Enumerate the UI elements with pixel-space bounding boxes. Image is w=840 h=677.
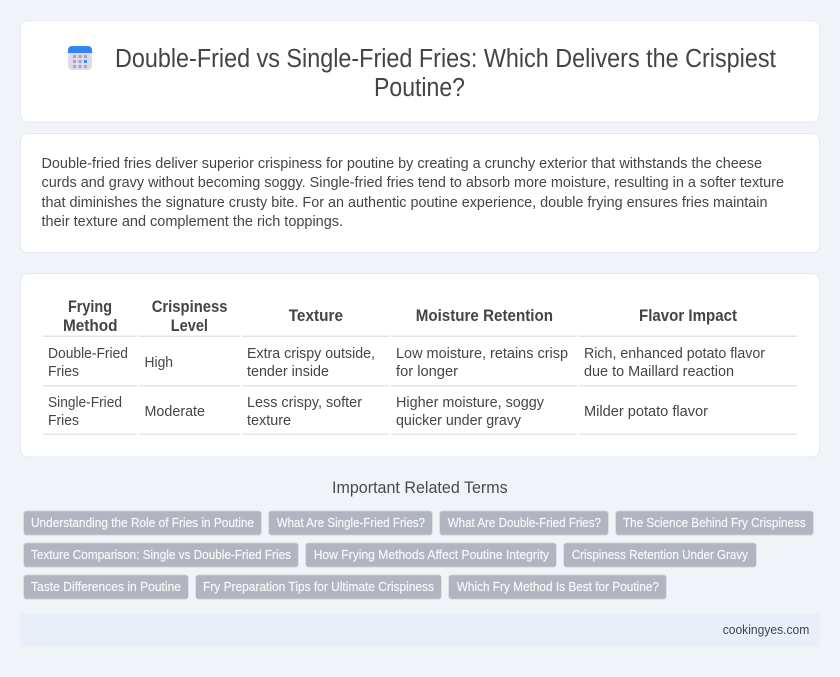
table row: double-fried fries: Double-Fried <box>48 345 128 362</box>
table header row: Crispiness <box>152 298 228 316</box>
table header row: Moisture Retention <box>416 307 553 325</box>
related term tags: Which Fry Method Is Best for Poutine? <box>457 579 659 594</box>
related term tags: Taste Differences in Poutine <box>31 579 181 594</box>
table row: double-fried fries: due to Maillard reaction <box>584 363 734 380</box>
table row: single-fried fries: Milder potato flavor <box>584 403 708 420</box>
table row: single-fried fries: Higher moisture, soggy <box>396 394 544 411</box>
table header row: Frying <box>68 298 112 316</box>
panel: comparison table <box>20 274 820 457</box>
table row: double-fried fries: Rich, enhanced potato flavor <box>584 345 765 362</box>
text block: introduction: their texture and complement the rich toppings. <box>42 213 343 230</box>
table row: single-fried fries: Fries <box>48 412 79 429</box>
title: Double-Fried vs Single-Fried Fries: Which Delivers the Crispiest <box>115 45 776 73</box>
text block: introduction <box>42 155 784 230</box>
table row: double-fried fries: Low moisture, retains crisp <box>396 345 568 362</box>
table row: single-fried fries: Single-Fried <box>48 394 122 411</box>
table header row: Texture <box>289 307 343 325</box>
table row: double-fried fries: Fries <box>48 363 79 380</box>
heading: important related terms: Important Related Terms <box>332 478 508 497</box>
table row: double-fried fries: Extra crispy outside, <box>247 345 375 362</box>
related term tags: Fry Preparation Tips for Ultimate Crispiness <box>203 579 434 594</box>
footer: cookingyes.com <box>723 622 809 637</box>
panel: title header <box>20 20 820 122</box>
table row: single-fried fries <box>48 394 708 429</box>
table header row: Level <box>171 317 208 335</box>
related term tags: The Science Behind Fry Crispiness <box>623 515 806 530</box>
table row: single-fried fries: Moderate <box>144 403 205 420</box>
related term tags: How Frying Methods Affect Poutine Integrity <box>314 547 549 562</box>
related term tags: Understanding the Role of Fries in Poutine <box>31 515 254 530</box>
title: Poutine? <box>374 74 465 102</box>
related term tags <box>24 511 814 599</box>
table row: double-fried fries: High <box>144 354 173 371</box>
table row: single-fried fries: Less crispy, softer <box>247 394 362 411</box>
related term tags: What Are Single-Fried Fries? <box>277 515 425 530</box>
table header row <box>63 298 737 335</box>
table row: double-fried fries: tender inside <box>247 363 329 380</box>
table header row: Method <box>63 317 118 335</box>
related term tags: Texture Comparison: Single vs Double-Fried Fries <box>31 547 291 562</box>
table row: single-fried fries: quicker under gravy <box>396 412 521 429</box>
related term tags: What Are Double-Fried Fries? <box>448 515 601 530</box>
footer <box>20 613 820 647</box>
icon: calendar <box>68 46 92 70</box>
related term tags: Crispiness Retention Under Gravy <box>572 547 748 562</box>
text block: introduction: Double-fried fries deliver superior crispiness for poutine by creating a crunchy exterior that withstands the cheese <box>42 155 762 172</box>
table row: single-fried fries: texture <box>247 412 291 429</box>
text block: introduction: that diminishes the signature crusty bite. For an authentic poutine experience, double frying ensures fries maintain <box>42 194 768 211</box>
title <box>115 45 776 102</box>
panel: introduction <box>20 134 820 252</box>
text block: introduction: curds and gravy without becoming soggy. Single-fried fries tend to absorb more moisture, resulting in a softer texture <box>42 174 784 191</box>
table header row: Flavor Impact <box>639 307 737 325</box>
table row: double-fried fries <box>48 345 765 380</box>
table row: double-fried fries: for longer <box>396 363 458 380</box>
